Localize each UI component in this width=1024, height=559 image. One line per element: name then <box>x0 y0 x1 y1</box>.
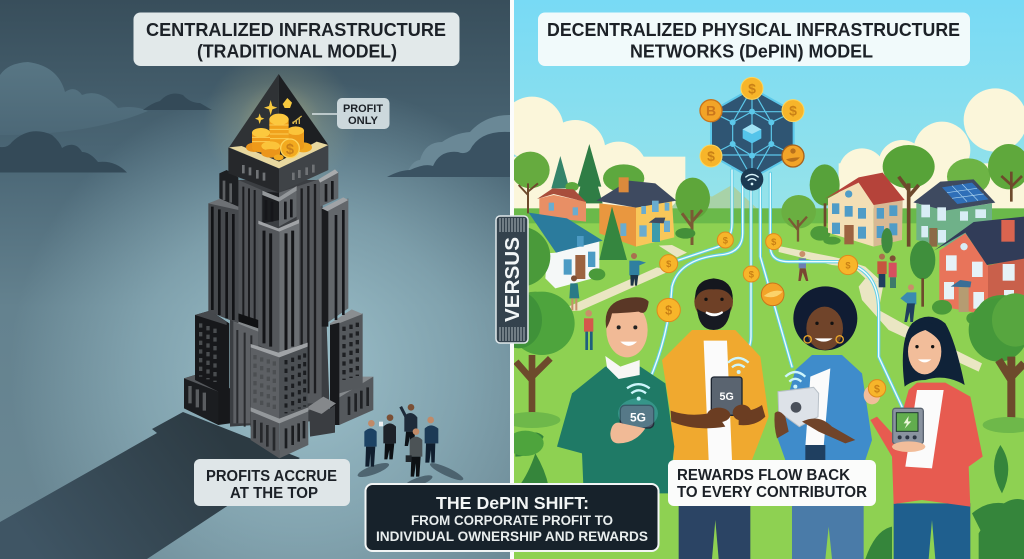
background trees <box>511 144 1024 247</box>
coin ring: $ <box>707 148 715 164</box>
reward coins along cables: $ <box>771 237 777 247</box>
coin ring <box>700 77 804 167</box>
pyramid and coins <box>229 74 279 168</box>
foreground trees and plants <box>495 292 1024 559</box>
title: decentralized <box>538 12 970 66</box>
connector line to profit label <box>312 113 337 115</box>
skyscraper: $ <box>286 142 294 158</box>
title: centralized <box>134 12 460 66</box>
label: rewards flow back <box>668 460 876 506</box>
side tiers <box>208 198 238 323</box>
title: decentralized: DECENTRALIZED PHYSICAL INFRASTRUCTURE <box>547 20 960 40</box>
person: man in green sweater <box>557 297 674 493</box>
figure 2 <box>379 414 396 459</box>
house: green with solar panels <box>913 179 995 247</box>
figure 3 <box>401 404 417 446</box>
person: woman in red cardigan: $ <box>874 383 880 395</box>
ground <box>514 208 1024 224</box>
title: decentralized: NETWORKS (DePIN) MODEL <box>630 42 873 62</box>
clouds <box>500 88 1024 210</box>
house: yellow <box>596 177 676 247</box>
coin ring: $ <box>748 80 756 96</box>
versus badge <box>496 216 528 343</box>
person: woman in denim jacket <box>774 286 872 559</box>
front low blocks <box>251 347 279 420</box>
label: profits accrue at the top <box>194 459 350 506</box>
network hub with coins <box>700 77 804 191</box>
person: man in green sweater: 5G <box>630 411 646 425</box>
rewards flow cables <box>649 170 902 407</box>
clouds <box>0 62 510 177</box>
title: centralized: (TRADITIONAL MODEL) <box>197 42 397 62</box>
person: woman in red cardigan <box>864 317 983 559</box>
upper central column <box>262 192 280 223</box>
callout: the DePIN shift: THE DePIN SHIFT: <box>436 493 589 513</box>
callout: the DePIN shift: INDIVIDUAL OWNERSHIP AND REWARDS <box>376 529 648 544</box>
figure 4 <box>406 428 422 477</box>
person: man in yellow shirt: 5G <box>720 391 734 403</box>
main tower back <box>230 180 330 427</box>
coin ring: B <box>706 103 716 119</box>
coin ring: $ <box>789 103 797 119</box>
house: orange <box>537 188 586 222</box>
front column <box>258 223 279 355</box>
house: cream with red roof <box>825 173 905 247</box>
figure 5 <box>425 417 438 463</box>
label: profit only: ONLY <box>348 115 379 127</box>
figure 1 <box>364 420 377 467</box>
skyscraper <box>184 50 373 458</box>
reward coins along cables <box>657 232 858 322</box>
label: profit only <box>337 98 390 129</box>
title: centralized: CENTRALIZED INFRASTRUCTURE <box>146 20 446 40</box>
label: rewards flow back: REWARDS FLOW BACK <box>677 467 851 484</box>
reward coins along cables: $ <box>665 304 672 318</box>
reward coins along cables: $ <box>666 259 672 269</box>
paths <box>557 245 982 372</box>
cap <box>228 147 279 193</box>
callout: the DePIN shift: FROM CORPORATE PROFIT TO <box>411 513 613 528</box>
building shadow <box>0 412 300 559</box>
reward coins along cables: $ <box>723 235 729 245</box>
person: man in yellow shirt <box>662 278 769 559</box>
foreground people <box>495 278 1024 559</box>
small background people <box>629 253 646 286</box>
lower wings <box>184 373 230 425</box>
shrubs <box>528 228 1007 324</box>
panel: centralized model <box>0 0 510 559</box>
label: rewards flow back: TO EVERY CONTRIBUTOR <box>677 484 867 501</box>
reward coins along cables: $ <box>749 269 755 279</box>
house: white and blue <box>529 213 603 288</box>
panel: DePIN model <box>490 0 1024 559</box>
center divider <box>510 0 514 559</box>
label: profit only: PROFIT <box>343 103 383 115</box>
group of businessmen <box>358 404 464 483</box>
landscape background <box>490 88 1024 559</box>
versus badge: VERSUS <box>502 237 524 322</box>
house: red with dark roof <box>934 217 1024 315</box>
callout: the DePIN shift <box>366 484 658 551</box>
label: profits accrue at the top: AT THE TOP <box>230 485 318 502</box>
reward coins along cables: $ <box>845 260 851 270</box>
label: profits accrue at the top: PROFITS ACCRUE <box>206 468 337 485</box>
